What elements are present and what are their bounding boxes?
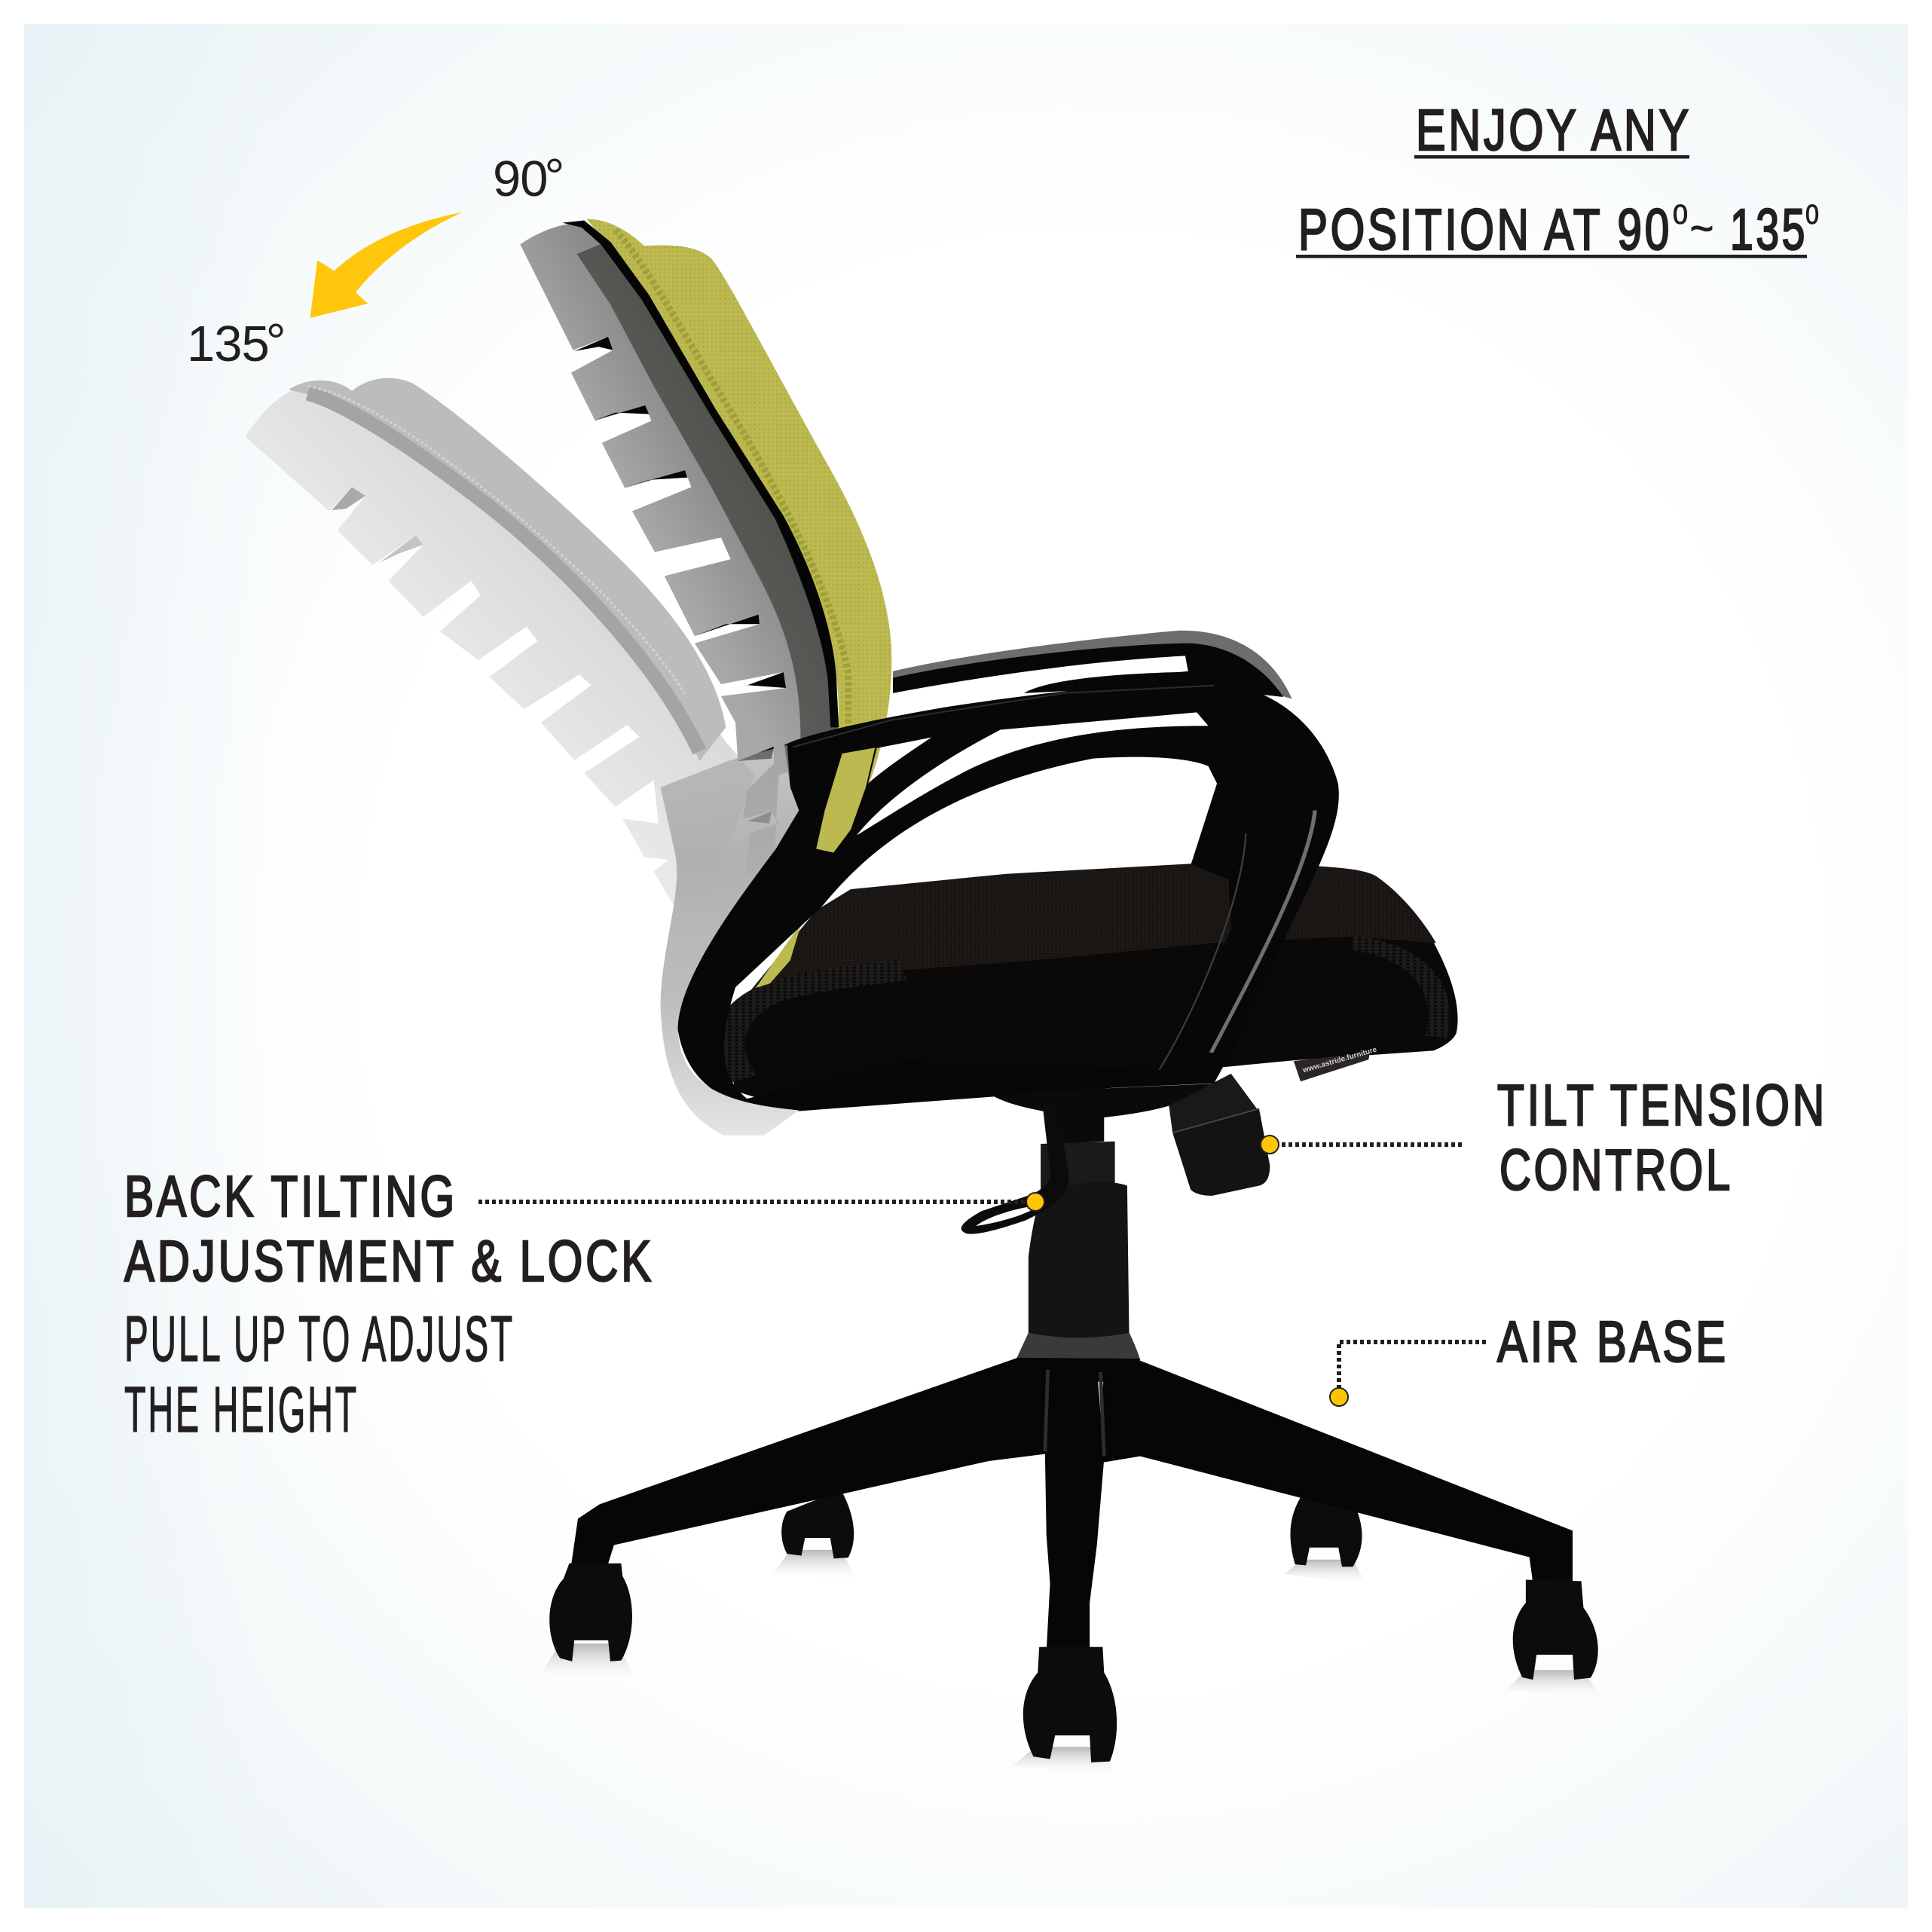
seat and armrest — [661, 682, 1458, 1136]
seat label tag: www.astride.furniture — [1301, 1046, 1378, 1075]
far armrest — [893, 631, 1292, 699]
tilt tension knob — [1169, 1074, 1270, 1196]
rear casters — [781, 1490, 1362, 1567]
heading — [1296, 98, 1819, 262]
label: pull up to adjust: PULL UP TO ADJUST — [124, 1304, 515, 1375]
chair illustration — [246, 219, 1601, 1776]
label: back tilting adjustment — [124, 1164, 654, 1294]
near armrest — [677, 682, 1339, 1111]
label: tilt tension control: TILT TENSION — [1497, 1073, 1827, 1138]
heading: 135 — [1730, 197, 1808, 262]
adjustment lever — [961, 1105, 1069, 1234]
label: back tilting adjustment: ADJUSTMENT & LOCK — [124, 1229, 654, 1294]
seat mechanism and gas lift column — [989, 1084, 1212, 1362]
callout line: tilt tension — [1261, 1136, 1463, 1154]
label: pull up to adjust — [124, 1304, 515, 1446]
caster shadows — [542, 1550, 1601, 1776]
ghost backrest at 135 degrees — [246, 378, 755, 904]
seat cushion — [724, 864, 1458, 1111]
heading: ~ — [1690, 207, 1713, 249]
angle label 135 degrees: 135 — [187, 316, 269, 372]
green strip through arm opening — [816, 747, 875, 853]
angle label 90 degrees: 90 — [493, 151, 548, 207]
callout line: air base — [1330, 1342, 1486, 1406]
arrow: tilt direction — [310, 212, 463, 318]
star base legs — [570, 1358, 1573, 1651]
heading: 0 — [1673, 199, 1688, 230]
label: back tilting adjustment: BACK TILTING — [124, 1164, 457, 1229]
angle label 135 degrees: ° — [266, 313, 286, 370]
chair base — [542, 1074, 1601, 1776]
heading: ENJOY ANY — [1416, 98, 1692, 163]
label: air base: AIR BASE — [1497, 1310, 1729, 1374]
label: tilt tension control: CONTROL — [1499, 1138, 1733, 1203]
ghost lower shell — [661, 745, 799, 1136]
backrest shell, mesh cushion and strip — [520, 219, 891, 876]
heading: 0 — [1805, 199, 1819, 230]
callout line: back tilting — [478, 1193, 1044, 1211]
armrest highlights — [793, 686, 1315, 1070]
label: pull up to adjust: THE HEIGHT — [124, 1374, 359, 1446]
heading: POSITION AT 90 — [1298, 197, 1672, 262]
front casters — [549, 1564, 1598, 1762]
label: tilt tension control — [1497, 1073, 1827, 1203]
angle label 90 degrees: ° — [545, 148, 564, 205]
